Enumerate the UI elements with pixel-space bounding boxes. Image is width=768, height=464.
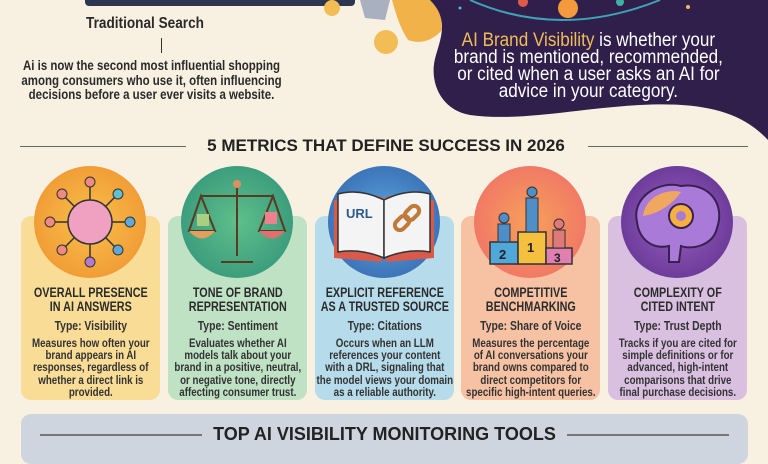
text: metric 1: whether a direct link is: [38, 373, 143, 387]
text: metric 5: Tracks if you are cited for: [619, 336, 737, 350]
text: metric 1: brand appears in AI: [45, 348, 136, 362]
text: traditional search note: decisions before a user ever visits a website.: [29, 86, 274, 102]
panel: metric 5: [608, 166, 747, 400]
panel: metric 1: [21, 166, 160, 400]
icon: podium: 2: [499, 247, 506, 262]
icon: laptop: [85, 0, 510, 47]
text: metric 5: Type: Trust Depth: [634, 318, 722, 333]
icon: podium: 1: [527, 240, 534, 255]
text: metric 4: Type: Share of Voice: [480, 318, 581, 333]
text: metric 3: Type: Citations: [348, 318, 422, 333]
panel: monitoring tools: [21, 414, 748, 464]
heading: traditional search: Traditional Search: [86, 15, 204, 32]
text: metric 1: Measures how often your: [32, 336, 150, 350]
text: metric 3: AS A TRUSTED SOURCE: [321, 299, 449, 314]
decor: purple blob: [420, 0, 768, 140]
text: metric 5: [618, 285, 737, 399]
text: metric 5: comparisons that drive: [624, 373, 731, 387]
text: metric 4: direct competitors for: [480, 373, 581, 387]
text: metric 5: CITED INTENT: [641, 299, 715, 314]
icon: book with link: [328, 166, 440, 278]
icon: podium: [474, 166, 586, 278]
text: metric 3: EXPLICIT REFERENCE: [326, 285, 444, 300]
heading: monitoring tools: TOP AI VISIBILITY MONITORING TOOLS: [213, 424, 556, 444]
panel: metric 4: [461, 166, 600, 400]
text: metric 2: [174, 285, 301, 399]
text: AI brand visibility definition: AI Brand Visibility is whether your: [462, 30, 715, 51]
text: metric 2: Type: Sentiment: [198, 318, 278, 333]
text: metric 2: brand in a positive, neutral,: [174, 360, 301, 374]
text: metric 1: OVERALL PRESENCE: [34, 285, 148, 300]
decor: orange blob: [392, 0, 442, 42]
icon: brain with gear: [621, 166, 733, 278]
text: AI brand visibility definition: brand is mentioned, recommended,: [454, 47, 723, 68]
text: metric 5: final purchase decisions.: [620, 385, 736, 399]
text: metric 3: as a reliable authority.: [334, 385, 436, 399]
heading: 5 metrics: 5 METRICS THAT DEFINE SUCCESS IN 2026: [207, 136, 565, 155]
text: metric 2: REPRESENTATION: [189, 299, 287, 314]
text: metric 3: [316, 285, 453, 399]
text: metric 3: Occurs when an LLM: [336, 336, 434, 350]
text: metric 4: Measures the percentage: [472, 336, 589, 350]
text: metric 1: responses, regardless of: [33, 360, 149, 374]
text: metric 4: COMPETITIVE: [494, 285, 567, 300]
text: metric 5: COMPLEXITY OF: [634, 285, 722, 300]
text: AI brand visibility definition: advice in your category.: [499, 81, 678, 102]
text: traditional search note: among consumers who use it, often influencing: [21, 72, 282, 88]
text: metric 4: BENCHMARKING: [486, 299, 576, 314]
text: metric 1: Type: Visibility: [55, 318, 127, 333]
text: metric 4: [466, 285, 596, 399]
text: traditional search note: Ai is now the second most influential shopping: [23, 57, 280, 73]
text: metric 4: specific high-intent queries.: [466, 385, 596, 399]
text: metric 2: TONE OF BRAND: [193, 285, 283, 300]
text: metric 2: models talk about your: [184, 348, 291, 362]
icon: presence network: [34, 166, 146, 278]
panel: metric 3: [315, 166, 454, 400]
text: traditional search note: [21, 57, 282, 102]
text: metric 3: the model views your domain: [317, 373, 453, 387]
text: metric 3: with a DRL, signaling that: [325, 360, 444, 374]
text: AI brand visibility definition: [454, 30, 723, 102]
text: metric 4: brand owns compared to: [473, 360, 589, 374]
text: metric 4: of AI conversations your: [474, 348, 588, 362]
text: metric 5: advanced, high-intent: [627, 360, 728, 374]
text: metric 2: or negative tone, directly: [180, 373, 296, 387]
text: metric 5: simple definitions or for: [622, 348, 733, 362]
text: metric 1: provided.: [69, 385, 113, 399]
icon: book with link: URL: [346, 206, 373, 221]
text: metric 2: affecting consumer trust.: [179, 385, 296, 399]
text: metric 2: Evaluates whether AI: [189, 336, 287, 350]
icon: network nodes: [458, 0, 690, 20]
icon: podium: 3: [554, 251, 561, 265]
text: metric 1: IN AI ANSWERS: [50, 299, 132, 314]
text: metric 3: references your content: [329, 348, 440, 362]
icon: scales: [181, 166, 293, 278]
text: AI brand visibility definition: or cited when a user asks an AI for: [457, 64, 720, 85]
text: metric 1: [32, 285, 150, 399]
panel: metric 2: [168, 166, 307, 400]
